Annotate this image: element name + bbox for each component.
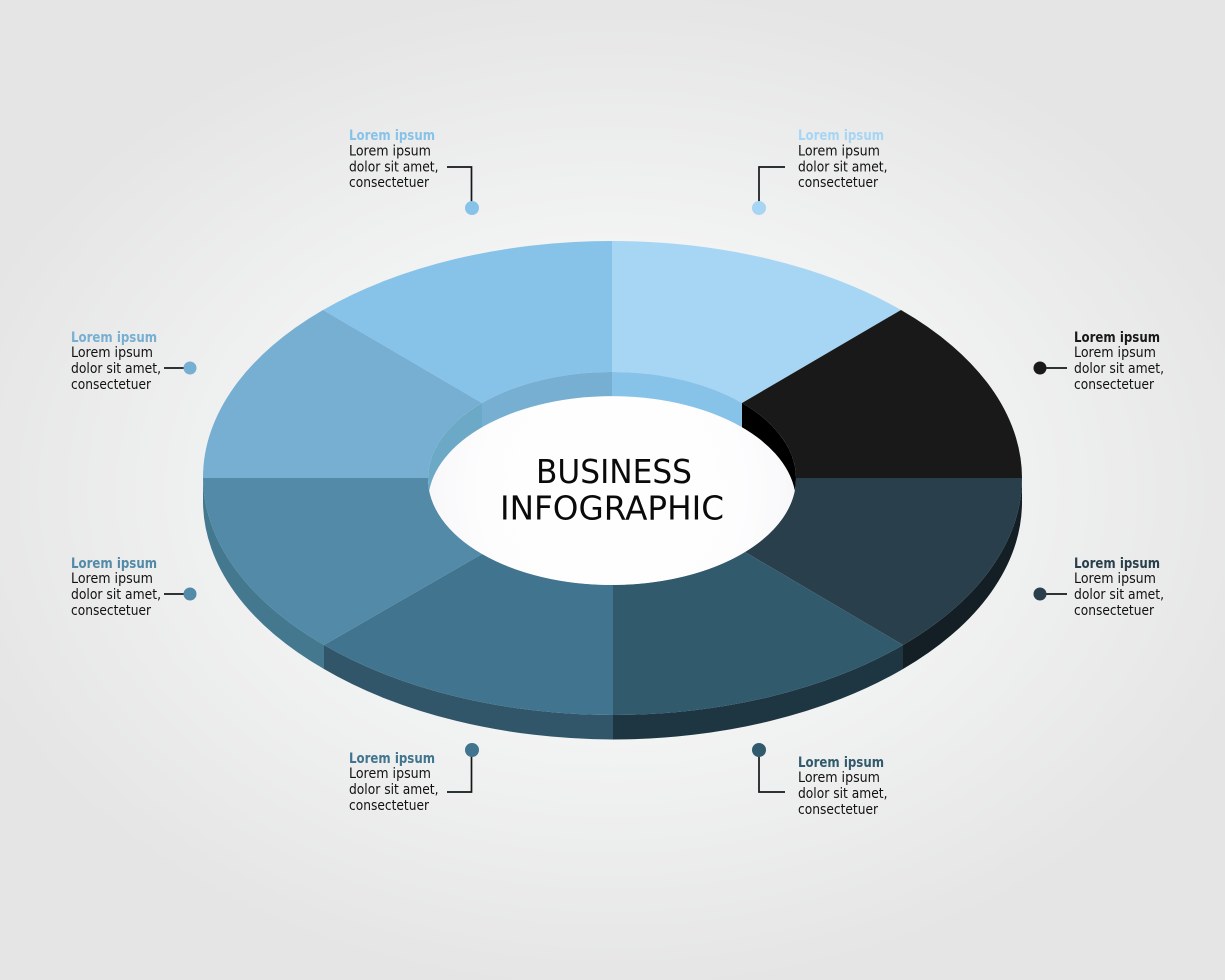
callout: right upper: Lorem ipsum	[1074, 330, 1160, 346]
segment: left lower	[203, 478, 482, 645]
callout: bottom left: dolor sit amet,	[349, 782, 438, 798]
donut chart	[203, 241, 1022, 739]
callout: right lower: consectetuer	[1074, 603, 1154, 619]
callout: top left: consectetuer	[349, 175, 429, 191]
callout: top left: Lorem ipsum	[349, 144, 431, 160]
callout: left upper: Lorem ipsum	[71, 330, 157, 346]
callout: right lower: Lorem ipsum	[1074, 571, 1156, 587]
callout: top left: dolor sit amet,	[349, 160, 438, 176]
callout: left lower: Lorem ipsum	[71, 556, 157, 572]
segment: bottom left	[324, 554, 613, 715]
callout: bottom right: Lorem ipsum	[798, 770, 880, 786]
callout: left upper: dolor sit amet,	[71, 361, 161, 377]
callout: top left: Lorem ipsum	[349, 128, 435, 144]
title	[500, 453, 724, 528]
callout: left lower: consectetuer	[71, 603, 151, 619]
segment: right upper	[742, 310, 1022, 478]
callout: top right: consectetuer	[798, 175, 878, 191]
callout: left lower: dolor sit amet,	[71, 587, 161, 603]
callout: bottom left: Lorem ipsum	[349, 751, 435, 767]
callout: bottom left: Lorem ipsum	[349, 766, 431, 782]
callout: left lower: Lorem ipsum	[71, 571, 153, 587]
callout: bottom right	[752, 743, 888, 818]
callout: top right: Lorem ipsum	[798, 128, 884, 144]
callout: right upper: consectetuer	[1074, 377, 1154, 393]
center hole	[429, 396, 795, 585]
title: BUSINESS	[536, 453, 692, 491]
callout: left lower	[71, 556, 196, 619]
callout: top right: Lorem ipsum	[798, 144, 880, 160]
callout: left upper	[71, 330, 196, 393]
callout: bottom right: consectetuer	[798, 802, 878, 818]
callout: right upper: dolor sit amet,	[1074, 361, 1164, 377]
callout: bottom left: consectetuer	[349, 798, 429, 814]
callout: bottom left	[349, 743, 479, 814]
callout: top right	[752, 128, 888, 215]
callout: bottom right: Lorem ipsum	[798, 755, 884, 771]
inner wall segments	[428, 372, 796, 500]
segment: top right	[612, 241, 901, 403]
callout: right lower: dolor sit amet,	[1074, 587, 1164, 603]
segment: top left	[323, 241, 612, 403]
callout: left upper: Lorem ipsum	[71, 345, 153, 361]
segment: right lower	[745, 478, 1022, 645]
callout: bottom right: dolor sit amet,	[798, 786, 888, 802]
callout: right upper: Lorem ipsum	[1074, 345, 1156, 361]
callout: left upper: consectetuer	[71, 377, 151, 393]
callout: right lower: Lorem ipsum	[1074, 556, 1160, 572]
title: INFOGRAPHIC	[500, 490, 724, 528]
callout: top right: dolor sit amet,	[798, 160, 888, 176]
side wall segments	[203, 478, 1022, 740]
callout: right upper	[1034, 330, 1164, 393]
segment: bottom right	[613, 552, 903, 715]
callout: top left	[349, 128, 479, 215]
segment: left upper	[203, 310, 482, 478]
callout: right lower	[1034, 556, 1164, 619]
